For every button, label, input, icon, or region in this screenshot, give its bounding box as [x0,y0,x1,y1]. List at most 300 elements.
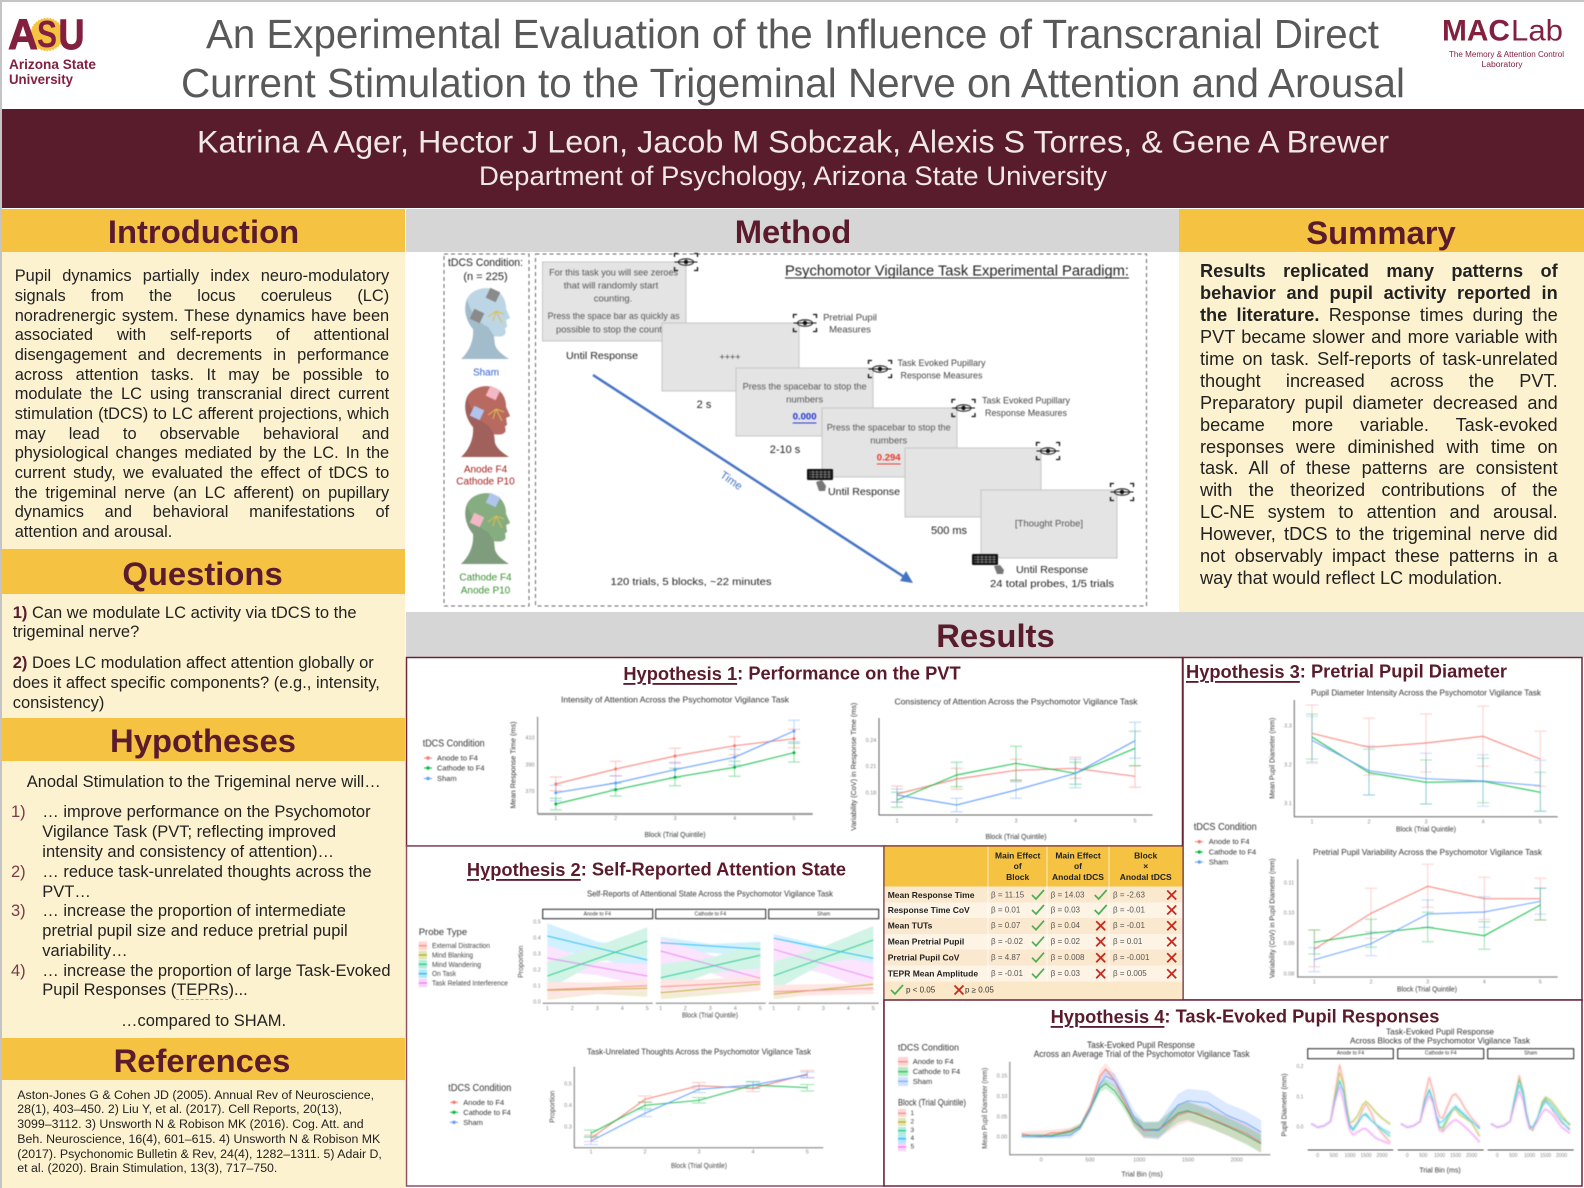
legend: tDCS condition 2: Cathode to F4 [463,1108,511,1117]
chart: self-reports of attentional state: Cathode to F4 [694,911,726,917]
label: task evoked measures 1: Task Evoked Pupillary [898,358,986,369]
chart: average trial pupil response: 1000 [1133,1158,1145,1164]
chart: self-reports of attentional state: 4 [621,1006,624,1012]
heading: hypothesis 2: Hypothesis 2: Self-Reported Attention State [467,858,846,880]
panel: tDCS conditions: tDCS Condition: [448,257,523,269]
chart: pretrial pupil variability: 0.09 [1284,941,1294,947]
label: 2 s: 2 s [697,399,712,411]
label: 2-10 s: 2-10 s [770,444,801,456]
text: summary body: time on task. Self-reports of task-unrelated [1200,349,1558,369]
legend: block: 4 [910,1135,914,1142]
chart: task-unrelated thoughts: Task-Unrelated Thoughts Across the Psychomotor Vigilance Task [587,1046,812,1056]
chart: pretrial pupil variability: Variability (CoV) in Pupil Diameter (mm) [1268,858,1276,978]
table rows: β = 0.02 [1051,937,1081,946]
text: summary body: not observably impact these patterns in a [1200,546,1558,566]
table rows: Mean Pretrial Pupil [888,937,964,947]
text: hypotheses list: intensity and consistency of attention)… [42,843,334,861]
label: until response 2: Until Response [828,486,900,498]
chart: consistency of attention [849,697,1152,841]
chart: average trial pupil response: Mean Pupil Diameter (mm) [980,1067,989,1149]
chart: pretrial pupil diameter: Mean Pupil Diameter (mm) [1268,717,1276,799]
legend: block: 1 [910,1110,914,1117]
chart: average trial pupil response: 2000 [1231,1158,1243,1164]
chart: task-unrelated thoughts: Block (Trial Quintile) [671,1163,727,1170]
chart: average trial pupil response: 0 [1040,1158,1043,1164]
label: pretrial pupil measures: Pretrial Pupil [823,312,877,324]
chart: self-reports of attentional state: 0.2 [533,967,541,973]
text: summary body: However, tDCS to the trigeminal nerve did [1200,524,1558,544]
chart: blocks pupil response: 1500 [1540,1153,1551,1159]
legend: probe type: Mind Blanking [432,950,473,960]
screen: instructions: possible to stop the count [556,324,662,336]
logo: Arizona State University: Arizona State [9,56,96,72]
text: hypotheses list: PVT… [42,882,91,900]
icon: eye 3 [868,360,892,378]
text: introduction body: stimulation (tDCS) to LC afferent projections, which [15,405,389,423]
text: references body: 3099–3112. 3) Unsworth N & Robison MK (2016). Cog. Att. and [17,1117,364,1131]
text: hypotheses list: Vigilance Task (PVT; reflecting improved [42,823,336,841]
chart: blocks pupil response: 1500 [1450,1153,1461,1159]
text: introduction body: disengagement and decrements in performance [15,346,389,364]
table header: Block [1006,872,1030,882]
chart: pretrial pupil diameter: 3.2 [1284,763,1292,769]
chart: self-reports of attentional state: 4 [734,1006,737,1012]
screen: fixation: ++++ [719,352,741,362]
title [181,11,1405,106]
chart: blocks pupil response: 0 [1316,1153,1319,1159]
text: hypotheses list: pretrial pupil size and reduce pretrial pupil [42,922,348,940]
chart: blocks pupil response: 2000 [1556,1153,1567,1159]
screen: instructions: that will randomly start [564,280,659,292]
table rows: β = 0.01 [1113,937,1143,946]
panel: tDCS conditions: (n = 225) [463,271,508,283]
author band [2,109,1584,208]
chart: consistency of attention: 4 [1074,819,1077,825]
legend: tDCS condition 4: Cathode to F4 [913,1067,960,1076]
chart: consistency of attention: 1 [895,819,899,825]
chart: pretrial pupil diameter: 1 [1310,820,1314,826]
text: questions body: trigeminal nerve? [13,623,139,641]
label: time: Time [718,469,744,493]
table rows: β = -0.01 [991,969,1024,978]
text: hypotheses list: … reduce task-unrelated thoughts across the [42,863,372,881]
screen: thought probe [981,490,1117,558]
table header: of [1014,861,1022,871]
legend: block: Block (Trial Quintile) [898,1098,966,1108]
chart: self-reports of attentional state: Proportion [518,945,525,978]
chart: pretrial pupil variability: 3 [1426,980,1429,986]
text: hypotheses list: 3) [11,902,26,920]
table rows: β = 0.005 [1113,969,1147,978]
chart: intensity of attention: Mean Response Time (ms) [508,721,518,808]
chart: blocks pupil response: Across Blocks of the Psychomotor Vigilance Task [1350,1036,1531,1046]
screen: stimulus zero: Press the spacebar to stop the [743,382,867,392]
chart: average trial pupil response: 1500 [1182,1158,1194,1164]
screen: fixation [662,323,799,391]
text: summary body: PVT became slower and more variable with [1200,327,1558,347]
icon: anode head [461,386,510,457]
heading: hypothesis 3: Hypothesis 3: Pretrial Pupil Diameter [1186,660,1507,682]
icon: eye 4 [952,400,975,416]
text: hypotheses list: … increase the proportion of large Task-Evoked [42,962,391,980]
legend: tDCS condition 4: Anode to F4 [913,1057,954,1066]
icon: sham head [461,288,510,359]
text: questions body [13,604,380,712]
legend: probe type: Mind Wandering [432,960,481,969]
logo: Arizona State University: U [58,11,84,59]
chart: self-reports of attentional state: 1 [659,1006,662,1012]
chart: self-reports of attentional state: Block (Trial Quintile) [682,1012,738,1020]
label: until response 1: Until Response [566,350,638,362]
panel: hypothesis 4 [884,1000,1582,1186]
icon: eye 2 [794,314,816,332]
legend: tDCS condition 1: tDCS Condition [423,738,485,750]
heading: hypothesis 1: Hypothesis 1: Performance on the PVT [623,662,961,684]
table header: Block [1134,851,1158,861]
text: hypotheses list: variability… [42,942,128,960]
chart: pretrial pupil diameter: Block (Trial Quintile) [1396,826,1456,834]
chart: blocks pupil response: 1500 [1360,1153,1372,1159]
chart: task-unrelated thoughts: 5 [806,1150,809,1156]
chart: self-reports of attentional state: Sham [817,911,830,917]
table header: Main Effect [995,851,1041,861]
chart: blocks pupil response: 0.2 [1297,1064,1304,1070]
text: references body: (2017). Psychonomic Bulletin & Rev, 24(4), 1282–1311. 5) Adair D, [17,1147,382,1161]
table rows: β = 4.87 [991,953,1021,962]
text: introduction body: the trigeminal nerve (an LC afferent) on pupillary [15,484,389,502]
screen: stimulus stopped: 0.294 [877,452,901,464]
chart: average trial pupil response: Across an Average Trial of the Psychomotor Vigilance Task [1034,1049,1250,1059]
chart: consistency of attention: 2 [955,819,958,825]
screen: blank [905,448,1041,517]
chart: intensity of attention: Block (Trial Quintile) [644,832,706,839]
panel: tDCS conditions [444,254,529,606]
chart: consistency of attention: Variability (CoV) in Response Time (ms) [849,702,858,831]
logo: Arizona State University [8,11,96,87]
text: references body: Beh. Neuroscience, 16(4), 601–615. 4) Unsworth N & Robison MK [17,1132,380,1146]
screen: stimulus stopped: Press the spacebar to stop the [827,422,951,434]
icon: eye 6 [1110,484,1134,500]
chart: consistency of attention: Consistency of Attention Across the Psychomotor Vigilance Task [894,697,1138,707]
text: introduction body: dynamics and behavioral manifestations of [15,503,389,521]
legend: tDCS condition 4: tDCS Condition [898,1042,959,1054]
table rows: β = 0.07 [991,921,1021,930]
panel: introduction [2,209,405,549]
text: summary body: task. All of these patterns are consistent [1200,458,1558,478]
text: questions body: does it affect specific components? (e.g., intensity, [13,674,380,692]
title: Current Stimulation to the Trigeminal Nerve on Attention and Arousal [181,60,1405,106]
chart: pretrial pupil variability: Pretrial Pupil Variability Across the Psychomotor Vigilance Task [1313,847,1543,857]
legend: tDCS condition 2: tDCS Condition [448,1083,511,1094]
legend: tDCS condition 3 [1194,822,1257,866]
table rows: β = 14.03 [1051,890,1085,900]
chart: average trial pupil response: Task-Evoked Pupil Response [1087,1040,1195,1050]
table header: of [1074,861,1082,871]
chart: task-unrelated thoughts: 0.5 [564,1082,572,1088]
heading: hypothesis 4: Hypothesis 4: Task-Evoked Pupil Responses [1051,1006,1439,1026]
chart: average trial pupil response: 500 [1085,1158,1095,1164]
table legend [891,985,994,994]
chart: pretrial pupil variability: 0.10 [1284,911,1294,917]
icon: cathode head [461,493,510,564]
panel: results heading: Results [936,617,1055,654]
screen: thought probe: [Thought Probe] [1015,518,1083,530]
chart: intensity of attention: 410 [525,736,535,742]
icon: eye 1 [674,254,698,270]
panel: hypothesis 2 [406,846,884,1186]
table header [884,846,1182,886]
legend: probe type: On Task [432,969,456,978]
chart: self-reports of attentional state: 5 [872,1006,875,1012]
table rows: β = 0.03 [1051,969,1081,978]
table rows: Pretrial Pupil CoV [888,953,960,963]
chart: average trial pupil response: 0.05 [997,1114,1007,1120]
legend: block: 2 [910,1118,914,1126]
icon: eye 5 [1036,442,1060,460]
text: hypotheses list: 2) [11,863,26,881]
panel: method heading: Method [735,213,851,250]
panel: references [2,1038,405,1188]
text: summary body: behavior and pupil activity reported in [1200,283,1558,303]
chart: self-reports of attentional state: 3 [822,1006,825,1012]
table rows: β = -0.01 [1113,921,1146,930]
legend: tDCS condition 2: Sham [463,1118,483,1127]
screen: stimulus zero: numbers [786,394,823,406]
table rows: β = -2.63 [1113,890,1146,900]
legend: tDCS condition 1: Sham [437,774,457,783]
chart: task-unrelated thoughts: 3 [697,1150,701,1156]
icon: keyboard and hand 1 [807,469,833,491]
text: introduction body: physiological changes mediated by the LC. In the [15,444,389,462]
heading: summary: Summary [1306,214,1456,251]
chart: pretrial pupil variability: 2 [1369,980,1373,986]
label: pretrial pupil measures: Measures [829,324,871,336]
chart: self-reports of attentional state: 1 [546,1006,549,1012]
chart: intensity of attention: 5 [792,816,796,822]
text: references body [17,1088,382,1175]
legend: tDCS condition 3: tDCS Condition [1194,822,1257,833]
chart: intensity of attention: Intensity of Attention Across the Psychomotor Vigilance Task [561,695,790,705]
top frame edge [0,0,1584,2]
chart: blocks pupil response: 0 [1496,1153,1499,1159]
chart: self-reports of attentional state: 2 [571,1006,574,1012]
chart: task-unrelated thoughts: Proportion [550,1090,556,1123]
panel: hypotheses [2,718,405,1038]
text: hypotheses list: … increase the proportion of intermediate [42,902,346,920]
logo: MACLab: Lab [1511,14,1563,48]
label: task evoked measures 1 [898,358,986,382]
heading: summary [1179,209,1584,252]
chart: pretrial pupil diameter: Pupil Diameter Intensity Across the Psychomotor Vigilance Task [1311,687,1542,697]
chart: self-reports of attentional state: 3 [596,1006,599,1012]
chart: blocks pupil response: Trial Bin (ms) [1419,1168,1461,1174]
label: 500 ms: 500 ms [931,525,968,537]
chart: consistency of attention: 5 [1133,819,1137,825]
affiliation: Department of Psychology, Arizona State University [479,161,1108,191]
label: anode F4 cathode P10 [456,464,515,488]
text: references body: Aston-Jones G & Cohen JD (2005). Annual Rev of Neuroscience, [17,1088,374,1102]
legend: probe type: Task Related Interference [432,978,508,988]
chart: blocks pupil response: 1000 [1524,1153,1535,1159]
panel: hypothesis 1 [406,658,1182,846]
table rows: β = -0.01 [1113,906,1146,914]
chart: blocks pupil response: 500 [1419,1153,1428,1159]
label: cathode F4 anode P10: Cathode F4 [459,572,512,584]
table header: Anodal tDCS [1052,872,1104,882]
legend: tDCS condition 4: Sham [913,1077,932,1086]
chart: pretrial pupil variability: 4 [1483,980,1486,986]
legend: tDCS condition 1: Cathode to F4 [437,764,485,772]
legend: tDCS condition 1 [423,738,485,783]
logo: Arizona State University: S [37,14,57,56]
chart: blocks pupil response: 500 [1509,1153,1518,1159]
chart: pretrial pupil diameter: 3.1 [1284,801,1292,807]
chart: self-reports of attentional state: 1 [772,1006,775,1012]
label: anode F4 cathode P10: Cathode P10 [456,476,515,488]
legend: tDCS condition 2 [448,1083,511,1127]
chart: self-reports of attentional state: 0.4 [533,935,541,941]
text: hypotheses list: Pupil Responses (TEPRs)... [42,980,248,998]
label: task evoked measures 2: Response Measures [985,408,1067,419]
text: hypotheses list: 4) [11,962,26,980]
chart: task-unrelated thoughts: 2 [643,1150,647,1156]
panel: method heading [406,209,1179,252]
table legend: p ≥ 0.05 [965,986,994,994]
text: hypotheses list [11,773,391,1030]
chart: pretrial pupil diameter: 3.3 [1284,724,1292,730]
legend: probe type [419,927,508,988]
chart: pretrial pupil variability: 0.11 [1284,881,1294,887]
left frame edge [0,0,2,1188]
label: pretrial pupil measures [823,312,877,336]
chart: intensity of attention: 1 [554,816,557,822]
text: references body: 28(1), 403–450. 2) Liu Y, et al. (2017). Cell Reports, 20(13), [17,1102,342,1116]
table rows [884,846,1182,982]
table rows: β = 0.008 [1051,953,1085,962]
table rows: Mean Response Time [888,890,975,900]
heading: introduction: Introduction [108,213,299,250]
text: summary body: with the theorized contributions of the [1200,480,1558,500]
chart: task-unrelated thoughts: 0.4 [564,1103,572,1109]
chart: self-reports of attentional state: Self-Reports of Attentional State Across the Psychomotor Vigilance Task [587,889,834,899]
chart: blocks pupil response: 2000 [1466,1153,1477,1159]
legend: tDCS condition 4 [898,1042,960,1086]
table header: × [1143,861,1148,871]
chart: blocks pupil response: Task-Evoked Pupil Response [1386,1027,1494,1037]
heading: references: References [114,1042,290,1079]
table legend: p < 0.05 [906,986,936,994]
chart: consistency of attention: 0.18 [866,791,876,797]
legend: tDCS condition 3: Sham [1209,858,1228,866]
logo: MACLab: Laboratory [1481,59,1523,69]
authors: Katrina A Ager, Hector J Leon, Jacob M Sobczak, Alexis S Torres, & Gene A Brewer [197,124,1389,160]
legend: probe type: Probe Type [419,927,467,938]
text: summary body [1200,261,1558,588]
chart: average trial pupil response: Trial Bin (ms) [1121,1172,1163,1178]
legend: tDCS condition 1: Anode to F4 [437,754,478,762]
label: task evoked measures 2: Task Evoked Pupillary [982,396,1070,406]
chart: pretrial pupil variability: 1 [1313,980,1316,986]
chart: task-unrelated thoughts: 0.3 [564,1124,572,1130]
text: summary body: LC-NE system to attention and arousal. [1200,502,1558,522]
chart: task-unrelated thoughts [550,1046,823,1170]
chart: consistency of attention: 0.24 [866,738,876,744]
chart: intensity of attention: 3 [673,816,677,822]
panel: summary [1179,209,1584,612]
label: sham: Sham [473,368,499,378]
panel: results heading [406,612,1584,657]
heading: hypotheses [2,718,405,761]
chart: blocks pupil response: 0.0 [1297,1124,1304,1130]
screen: stimulus stopped [822,408,957,477]
label: task evoked measures 2 [982,396,1070,419]
screen: stimulus stopped: numbers [870,436,907,446]
heading: introduction [2,209,405,252]
chart: task-unrelated thoughts: 1 [589,1150,593,1156]
table: statistical results [884,846,1183,1000]
table rows: β = -0.02 [991,937,1024,946]
logo: Arizona State University: University [9,71,73,87]
icon: keyboard and hand 2 [972,554,1004,574]
screen: instructions [542,262,686,341]
logo: MACLab [1442,14,1564,69]
chart: consistency of attention: Block (Trial Quintile) [986,834,1046,841]
chart: consistency of attention: 0.21 [866,764,876,770]
chart: intensity of attention: 4 [733,816,736,822]
legend: tDCS condition 3: Cathode to F4 [1209,848,1256,856]
chart: pretrial pupil variability: 0.08 [1284,971,1294,977]
chart: blocks pupil response: 0 [1406,1153,1409,1159]
text: introduction body: attention and arousal. [15,523,172,541]
chart: self-reports of attentional state [518,889,879,1020]
text: introduction body: signals from the locus coeruleus (LC) [15,287,389,305]
chart: blocks pupil response: 500 [1330,1153,1338,1159]
table rows: TEPR Mean Amplitude [888,969,978,979]
chart: blocks pupil response: 0.1 [1297,1094,1304,1100]
text: questions body: 2) Does LC modulation affect attention globally or [13,654,374,672]
label: until response 3: Until Response [1016,564,1088,576]
text: summary body: Preparatory pupil diameter decreased and [1200,393,1558,413]
chart: average trial pupil response: 0.00 [997,1135,1007,1141]
text: questions body: 1) Can we modulate LC activity via tDCS to the [13,604,357,622]
chart: pretrial pupil variability: Block (Trial Quintile) [1397,986,1457,994]
text: introduction body: Pupil dynamics partially index neuro-modulatory [15,267,389,285]
chart: blocks pupil response: Pupil Diameter (mm) [1282,1074,1288,1136]
screen: instructions: Press the space bar as quickly as [548,311,680,322]
chart: intensity of attention: 390 [525,762,535,768]
legend: tDCS condition 3: Anode to F4 [1209,837,1250,846]
screen: instructions: counting. [594,294,632,304]
chart: pretrial pupil variability [1268,847,1558,994]
label: total probes: 24 total probes, 1/5 trials [990,578,1114,590]
label: cathode F4 anode P10: Anode P10 [461,586,511,596]
chart: self-reports of attentional state: Anode to F4 [584,911,611,917]
chart: pretrial pupil diameter: 4 [1481,820,1485,826]
chart: consistency of attention: 3 [1014,819,1018,825]
chart: self-reports of attentional state: 5 [646,1006,649,1012]
logo: MACLab: The Memory & Attention Control [1449,49,1564,59]
table rows: β = 0.01 [991,906,1021,914]
chart: blocks pupil response: Sham [1524,1051,1537,1057]
text: hypotheses list: Anodal Stimulation to the Trigeminal nerve will… [27,773,381,791]
text: introduction body: noradrenergic system. These dynamics have been [15,307,389,325]
label: trials blocks duration: 120 trials, 5 blocks, ~22 minutes [610,576,772,588]
chart: pretrial pupil diameter: 5 [1539,820,1542,826]
chart: self-reports of attentional state: 0.1 [533,983,541,989]
heading: questions [2,549,405,594]
panel: questions [2,549,405,718]
screen: instructions: For this task you will see zeroes [549,268,678,278]
